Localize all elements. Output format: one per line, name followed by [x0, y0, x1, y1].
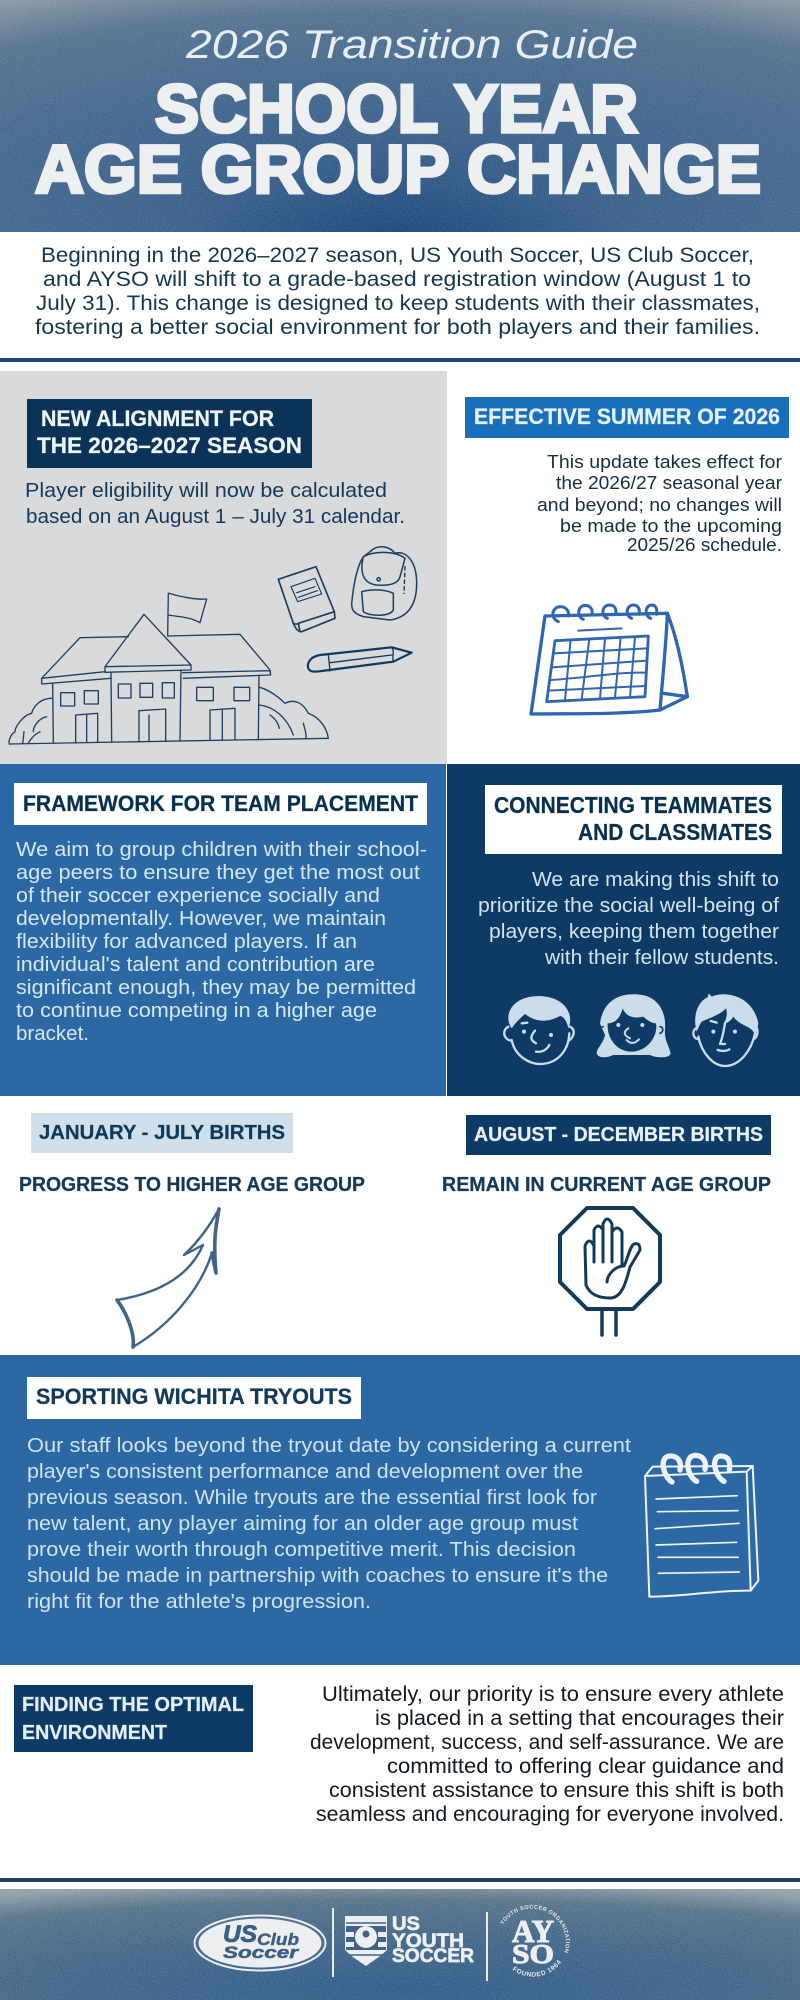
text: tryouts body: right fit for the athlete's progression.: [27, 1591, 371, 1613]
text: player eligibility: Player eligibility will now be calculated: [25, 480, 387, 502]
icon: calendar: [531, 605, 687, 714]
heading: progress: PROGRESS TO HIGHER AGE GROUP: [19, 1174, 365, 1196]
text: framework body: significant enough, they may be permitted: [16, 977, 416, 999]
heading: framework: FRAMEWORK FOR TEAM PLACEMENT: [23, 791, 419, 816]
label: august to december: AUGUST - DECEMBER BIRTHS: [474, 1124, 763, 1146]
column: january to july births: [19, 1113, 365, 1347]
logo: US Youth Soccer: SOCCER: [392, 1946, 474, 1967]
text: closing statement: [310, 1683, 784, 1826]
text: connecting body: [478, 869, 779, 969]
text: framework body: of their soccer experience socially and: [16, 885, 380, 907]
logo: AYSO: SO: [512, 1939, 554, 1969]
heading: remain: REMAIN IN CURRENT AGE GROUP: [442, 1174, 771, 1196]
title: AGE GROUP CHANGE: [35, 132, 761, 208]
panel: finding the optimal environment: [14, 1683, 784, 1826]
panel: effective summer: [465, 397, 789, 714]
title: [35, 71, 761, 208]
heading: connecting teammates: CONNECTING TEAMMATES: [494, 792, 772, 818]
text: player eligibility: [25, 480, 405, 528]
text: closing statement: consistent assistance to ensure this shift is both: [329, 1779, 784, 1802]
text: framework body: bracket.: [16, 1023, 89, 1045]
heading: effective summer: EFFECTIVE SUMMER OF 2026: [474, 404, 780, 429]
text: framework body: flexibility for advanced players. If an: [16, 931, 357, 953]
panel: new alignment: [0, 371, 447, 764]
heading: tryouts: [27, 1377, 361, 1419]
text: framework body: to continue competing in a higher age: [16, 1000, 377, 1022]
text: closing statement: seamless and encouraging for everyone involved.: [316, 1803, 784, 1826]
heading: finding the optimal environment: FINDING THE OPTIMAL: [22, 1694, 244, 1716]
text: tryouts body: Our staff looks beyond the tryout date by considering a current: [27, 1435, 631, 1457]
text: update takes effect: 2025/26 schedule.: [627, 535, 782, 555]
intro text: July 31). This change is designed to keep students with their classmates,: [36, 292, 760, 315]
text: update takes effect: and beyond; no changes will: [537, 495, 782, 515]
logo: US Club Soccer: [194, 1916, 326, 1970]
text: tryouts body: prove their worth through competitive merit. This decision: [27, 1539, 576, 1561]
text: connecting body: with their fellow students.: [544, 947, 779, 969]
text: closing statement: development, success, and self-assurance. We are: [310, 1731, 784, 1754]
icon: pencil: [308, 647, 412, 672]
icon: notebook: [278, 567, 335, 632]
text: tryouts body: should be made in partnership with coaches to ensure it's the: [27, 1565, 608, 1587]
intro text: [35, 244, 760, 339]
icon: girl face: [597, 994, 671, 1057]
text: framework body: We aim to group children with their school-: [16, 839, 427, 861]
logo: AYSO: YOUTH SOCCER ORGANIZATION: [500, 1904, 570, 1953]
subtitle: 2026 Transition Guide: [185, 23, 638, 67]
panel: sporting wichita tryouts: [0, 1355, 800, 1665]
text: player eligibility: based on an August 1 – July 31 calendar.: [26, 506, 405, 528]
heading: new alignment: [27, 399, 312, 468]
logo: US Club Soccer: US: [223, 1921, 257, 1948]
header banner: [0, 0, 800, 232]
text: closing statement: is placed in a setting that encourages their: [375, 1707, 784, 1730]
panel: connecting teammates: [447, 764, 800, 1096]
logo: US Youth Soccer: [345, 1914, 474, 1967]
text: framework body: individual's talent and contribution are: [16, 954, 375, 976]
text: update takes effect: This update takes effect for: [547, 452, 782, 472]
text: framework body: [16, 839, 427, 1045]
text: tryouts body: player's consistent performance and development over the: [27, 1461, 583, 1483]
heading: new alignment: THE 2026–2027 SEASON: [37, 433, 302, 458]
text: update takes effect: the 2026/27 seasonal year: [556, 473, 782, 493]
heading: effective summer: [465, 397, 789, 438]
icon: boy face right: [693, 993, 758, 1066]
intro text: fostering a better social environment for both players and their families.: [35, 316, 760, 339]
heading: framework: [14, 783, 427, 825]
heading: connecting teammates: AND CLASSMATES: [578, 819, 772, 845]
icon: upward arrow: [117, 1209, 219, 1347]
intro text: Beginning in the 2026–2027 season, US Youth Soccer, US Club Soccer,: [41, 244, 754, 267]
icon: backpack: [352, 547, 417, 620]
heading: connecting teammates: [485, 785, 782, 854]
text: closing statement: committed to offering clear guidance and: [387, 1755, 784, 1778]
icon: notepad: [645, 1455, 758, 1597]
text: closing statement: Ultimately, our priority is to ensure every athlete: [322, 1683, 784, 1706]
text: update takes effect: [537, 452, 782, 555]
label: january to july: JANUARY - JULY BIRTHS: [39, 1122, 285, 1144]
icon: stop hand sign: [560, 1208, 660, 1335]
text: tryouts body: previous season. While tryouts are the essential first look for: [27, 1487, 597, 1509]
text: connecting body: players, keeping them together: [489, 921, 779, 943]
text: tryouts body: [27, 1435, 631, 1613]
text: framework body: age peers to ensure they get the most out: [16, 862, 420, 884]
logo: US Youth Soccer: YOUTH: [392, 1931, 464, 1952]
text: connecting body: prioritize the social well-being of: [478, 895, 779, 917]
icon: boy face left: [504, 996, 574, 1064]
logo: AYSO: AY: [512, 1913, 554, 1949]
text: update takes effect: be made to the upcoming: [560, 516, 782, 536]
text: connecting body: We are making this shift to: [532, 869, 779, 891]
logo: US Club Soccer: Soccer: [223, 1943, 300, 1962]
text: tryouts body: new talent, any player aiming for an older age group must: [27, 1513, 578, 1535]
intro text: and AYSO will shift to a grade-based registration window (August 1 to: [43, 268, 751, 291]
label: august to december: [466, 1115, 771, 1155]
logo: US Club Soccer: Club: [257, 1930, 299, 1949]
logo: AYSO: [500, 1904, 570, 1977]
title: SCHOOL YEAR: [155, 71, 638, 147]
heading: finding the optimal environment: ENVIRONMENT: [22, 1722, 167, 1744]
icon: school building: [9, 593, 328, 744]
logo: AYSO: FOUNDED 1964: [512, 1960, 561, 1977]
logo: US Youth Soccer: US: [392, 1914, 420, 1935]
footer band: [0, 1889, 800, 2000]
text: framework body: developmentally. However, we maintain: [16, 908, 386, 930]
panel: framework for team placement: [0, 764, 446, 1096]
column: august to december births: [442, 1115, 771, 1335]
icon: three student faces: [504, 993, 758, 1066]
heading: tryouts: SPORTING WICHITA TRYOUTS: [36, 1384, 352, 1409]
label: january to july: [31, 1113, 293, 1153]
heading: new alignment: NEW ALIGNMENT FOR: [41, 406, 274, 431]
heading: finding the optimal environment: [14, 1685, 253, 1752]
